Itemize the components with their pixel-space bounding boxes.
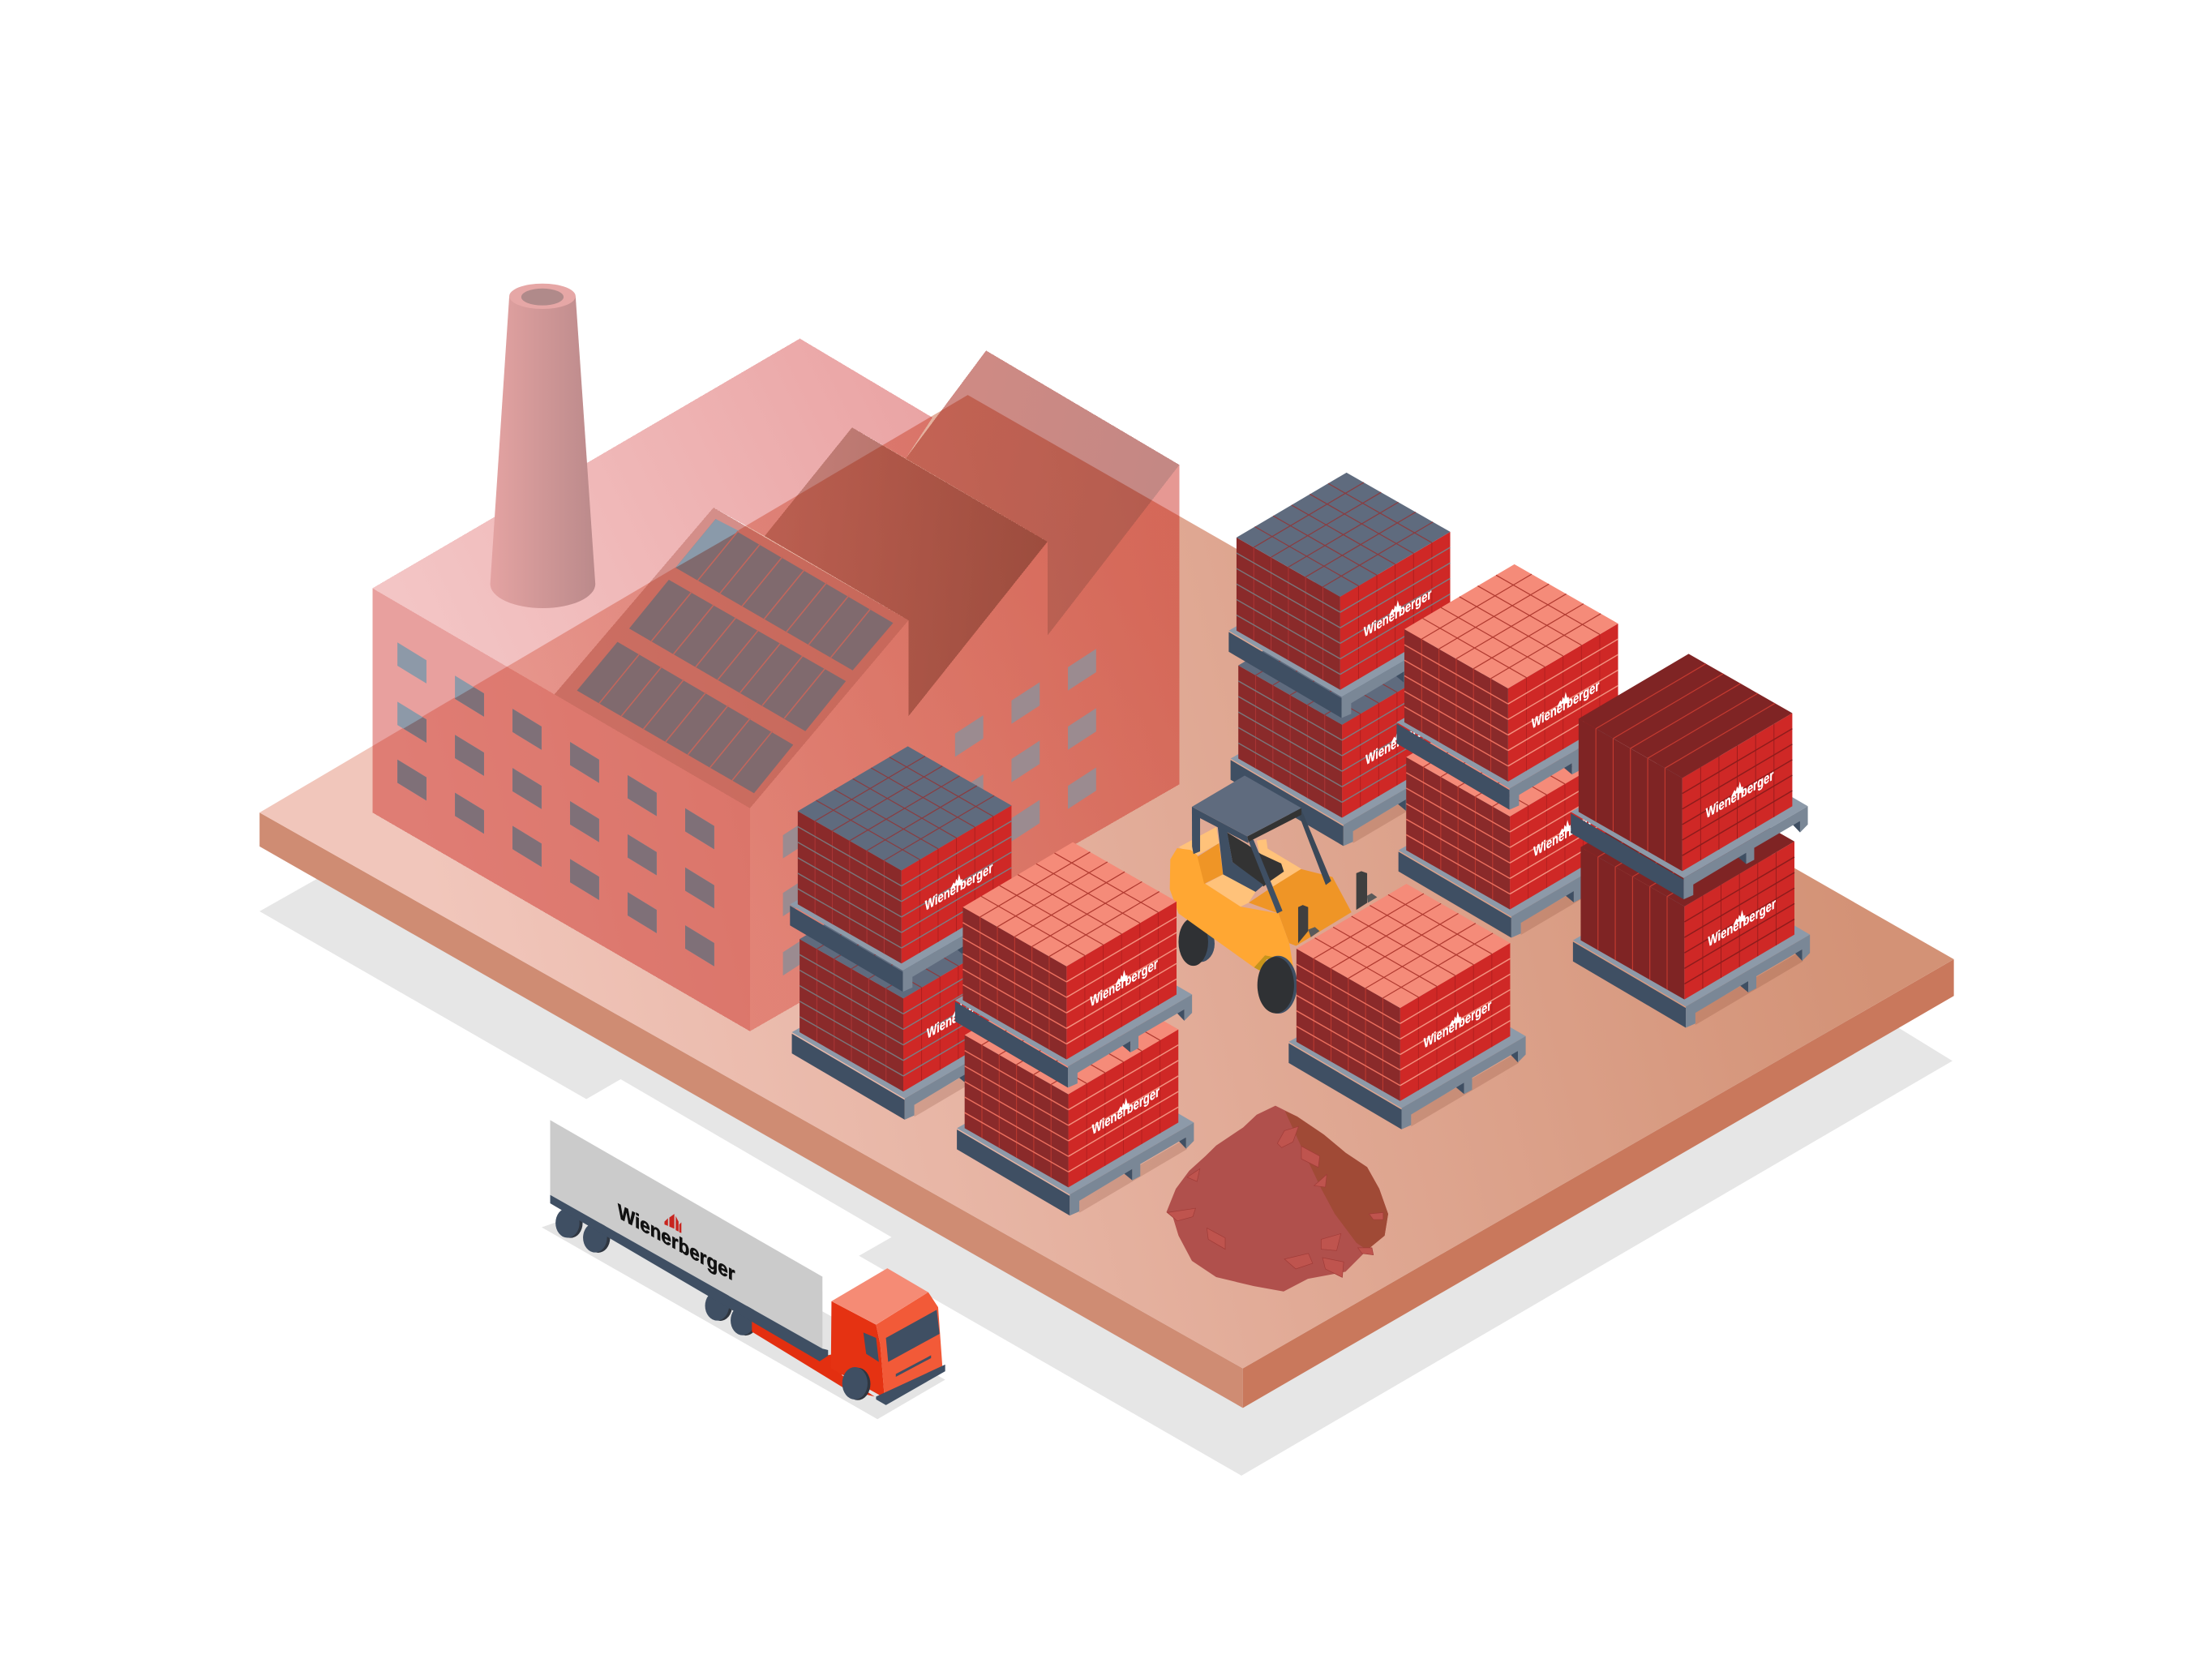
chimney [491,284,595,608]
side window [864,1332,879,1362]
cab side [831,1301,885,1398]
back saw-tooth roof [906,350,1179,636]
truck [542,1079,945,1419]
front fork [1298,905,1319,943]
truck shadow [542,1199,945,1419]
cab inner [1198,843,1223,884]
brick pallet stack: back gray: Wienerberger [1365,713,1434,768]
clay pile [1166,1106,1388,1292]
red chassis [752,1312,875,1396]
left wall [372,588,750,1031]
cab frame [1218,825,1263,892]
front saw-tooth roof frame [555,508,908,808]
front wheel [1258,956,1297,1014]
windshield [886,1310,940,1362]
factory flat roof [372,339,932,694]
brick pallet stack: front gray: Wienerberger [927,987,995,1042]
cab wheel [842,1367,870,1400]
platform [259,395,1954,1408]
seat [1227,832,1284,886]
rear wheel [1178,918,1215,966]
cab front [876,1292,942,1398]
grille [896,1355,931,1377]
platform top [259,395,1954,1369]
trailer logo mark [664,1214,681,1233]
brick pallet stack: front salmon [955,842,1194,1215]
trailer logo text: Wienerberger [618,1199,735,1287]
forklift main body [1170,848,1296,984]
brick pallet stack: back gray [1228,473,1468,846]
bumper [876,1365,945,1405]
rear fork [1357,871,1377,910]
trailer roof [551,1079,892,1277]
canopy [1192,776,1301,843]
brick pallet stack: front salmon: Wienerberger [1092,1082,1160,1138]
brick shards [1168,1126,1383,1277]
trailer wheels [555,1208,757,1335]
rear deck [1178,827,1219,855]
rear pillar [1192,807,1200,854]
brick pallet stack: back salmon: Wienerberger [1533,804,1601,860]
brick pallet stack: back salmon [1396,564,1635,937]
cab roof [831,1268,928,1324]
brick pallet stack: front gray [790,746,1029,1120]
middle saw-tooth roof [765,427,1048,716]
trailer side [551,1120,822,1348]
ground shadow [259,875,1953,1476]
front pillar [1247,838,1283,914]
left wall windows [397,642,714,967]
right wall [750,465,1179,1031]
brick pallet stack: front gray: Wienerberger [925,859,993,914]
forklift [1170,776,1377,1014]
trailer underframe [551,1195,828,1361]
brick pallet stack: back salmon: Wienerberger [1532,677,1600,732]
factory building [372,284,1179,1031]
brick pallet stack: right dark [1571,654,1810,1027]
brick pallet stack: back gray: Wienerberger [1364,585,1432,641]
brick pallet single stack [1288,884,1526,1130]
brick pallet stack: front salmon: Wienerberger [1090,954,1158,1010]
forklift side body [1249,869,1352,946]
platform right side [1243,959,1954,1408]
brick pallet stack: right dark: Wienerberger [1708,894,1776,950]
solar panels [577,519,893,793]
floor plate [1206,874,1255,907]
platform left side [259,812,1243,1408]
right wall windows [783,649,1096,975]
seat deck [1257,839,1301,886]
fender [1254,955,1278,971]
brick pallet single stack: Wienerberger [1424,997,1492,1052]
brick pallet stack: right dark: Wienerberger [1706,766,1774,821]
right pillar [1297,809,1331,885]
truck cab [831,1268,945,1405]
